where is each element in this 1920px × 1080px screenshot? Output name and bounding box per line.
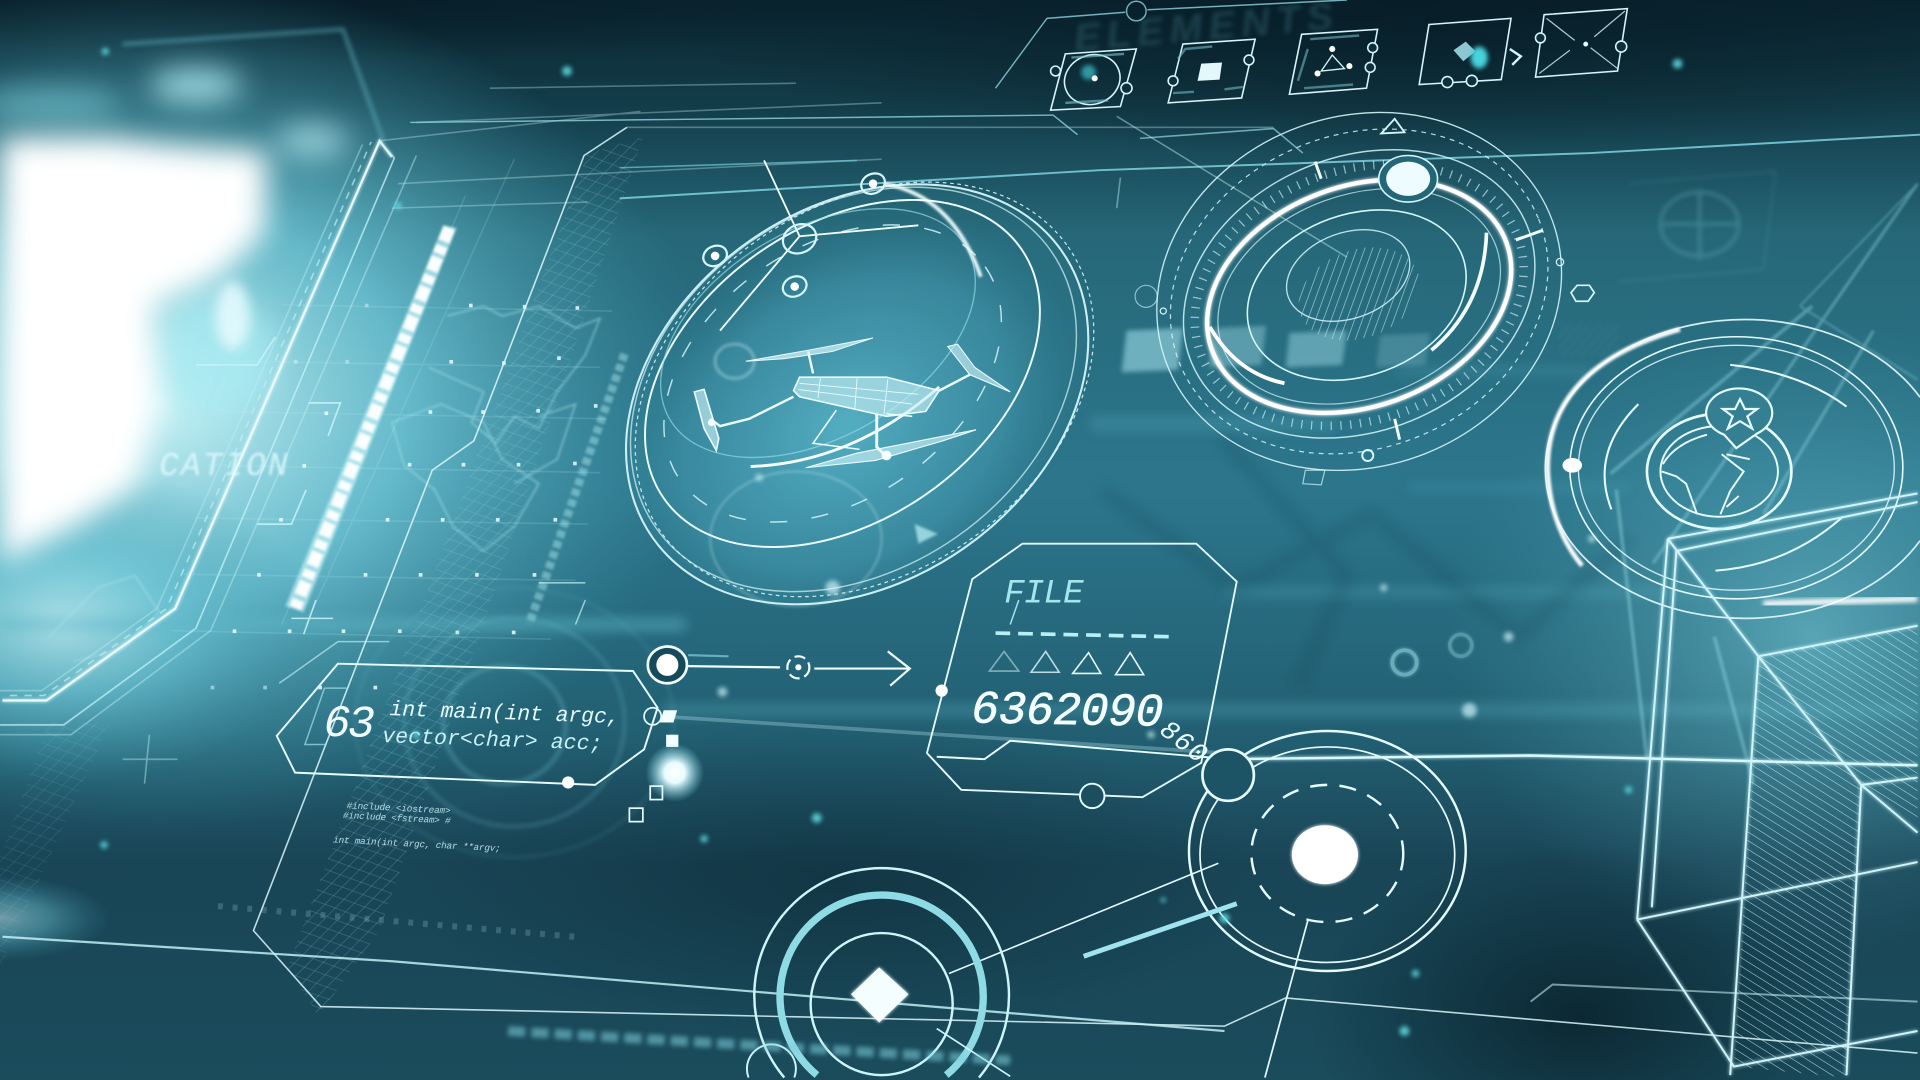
icon: target — [1051, 47, 1136, 112]
heading: CATION: CATION — [159, 447, 288, 485]
icon: faint crosshair globe — [1558, 171, 1776, 358]
segmented light bar — [285, 225, 457, 612]
small code text: int main(int argc, char **argv; — [333, 834, 501, 854]
faint sonar rings behind code panel — [355, 588, 673, 857]
particles — [100, 48, 1682, 1036]
dot grid — [211, 304, 598, 689]
small rings — [1392, 634, 1472, 675]
panel: diamond ring — [747, 868, 1010, 1078]
panel: drone dome radar — [545, 96, 1173, 691]
triangle marker — [915, 524, 938, 544]
top connector line — [410, 0, 1347, 135]
wireframe cube — [1531, 493, 1918, 1078]
icon: cross box — [1536, 9, 1627, 77]
icon: chevron — [1510, 49, 1521, 65]
small code text: #include <fstream> # — [343, 810, 451, 827]
small code text — [333, 800, 501, 854]
small code text: #include <iostream> — [346, 800, 451, 817]
soft spots — [718, 474, 1596, 738]
panel: target ring right — [949, 731, 1466, 1078]
stacked squares and glow — [629, 710, 704, 822]
icon: star pin — [1706, 388, 1772, 448]
number: 6362090 — [971, 683, 1164, 740]
panel: globe ring — [1545, 320, 1920, 618]
mesh strip — [0, 137, 643, 1016]
antenna lines — [720, 160, 918, 331]
background blocks — [1122, 326, 1430, 372]
icon: triangle nodes — [1289, 29, 1378, 94]
bright cloud glow — [0, 69, 349, 563]
panel: right radar ring — [1106, 57, 1612, 526]
panel: file — [927, 544, 1237, 808]
small number: 860 — [1153, 716, 1212, 771]
icon: square — [1168, 39, 1255, 103]
code panel — [277, 664, 661, 789]
icon row — [1051, 9, 1627, 112]
code panel: vector<char> acc; — [382, 725, 603, 757]
number 63: 63 — [323, 698, 375, 751]
small target nodes — [778, 219, 821, 259]
hatched side plane — [1734, 656, 1861, 1078]
light rays — [1610, 184, 1918, 784]
lower arc — [751, 387, 939, 467]
icon: earth — [1647, 414, 1791, 529]
map outlines — [49, 306, 600, 661]
bright arc — [884, 184, 981, 277]
heading: FILE: FILE — [1004, 574, 1084, 613]
code lines: int main(int argc, — [389, 698, 620, 730]
hatched top plane — [1758, 626, 1918, 818]
triangles — [989, 651, 1144, 675]
connector with arrow — [648, 647, 910, 686]
icon: drone — [694, 338, 1010, 468]
bottom segmented strip — [508, 1031, 1010, 1060]
icon: cube marker — [1419, 18, 1511, 88]
dashed divider — [996, 633, 1171, 637]
